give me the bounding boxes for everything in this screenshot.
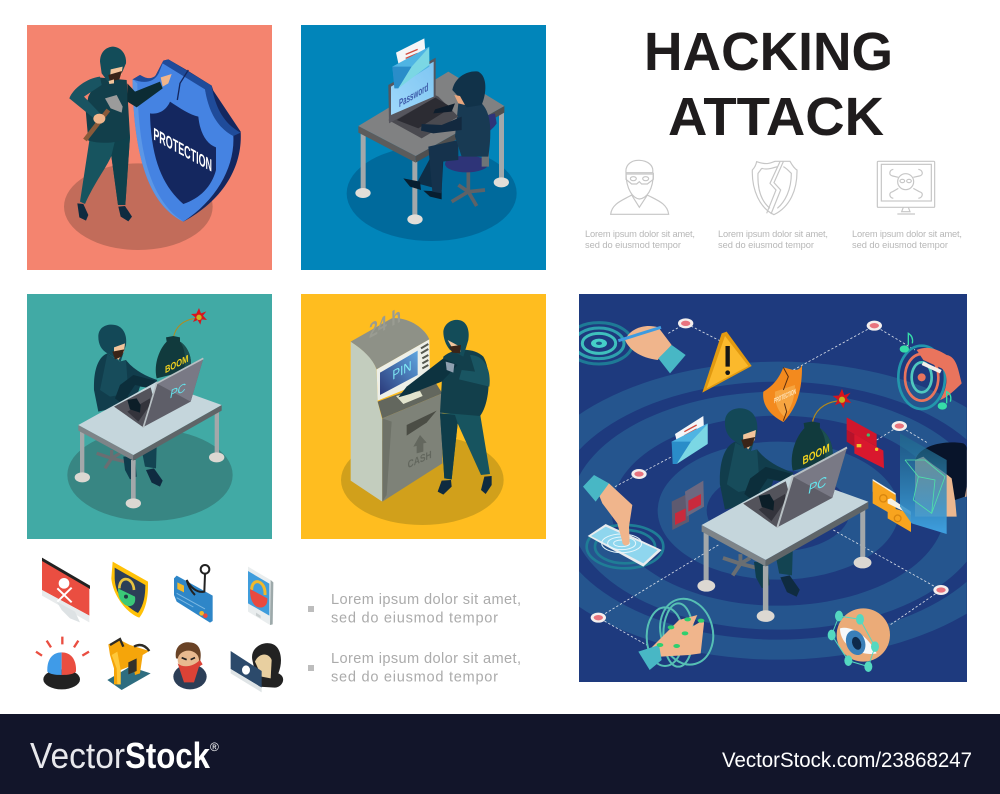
icon: phishing credit card	[174, 565, 213, 623]
title: HACKING	[644, 22, 893, 82]
network nodes	[591, 318, 949, 623]
icon: tablet with padlock	[248, 567, 273, 625]
icon: fingerprint phone	[583, 475, 663, 568]
hacker from behind	[403, 71, 490, 199]
icon: credit cards	[847, 417, 884, 468]
footer logo: Vector	[30, 735, 125, 776]
footer bar	[0, 714, 1000, 794]
icon: broken shield outline	[752, 161, 797, 215]
text block: bullet 1: Lorem ipsum dolor sit amet,	[331, 592, 521, 608]
icon: face recognition	[900, 433, 969, 534]
icon: hand drawing on target	[566, 323, 686, 373]
icon: trojan horse	[107, 639, 151, 690]
panel: hacker breaking protection shield	[27, 25, 272, 270]
text block: bullet 1	[308, 592, 521, 626]
caption 2: sed do eiusmod tempor	[718, 240, 814, 250]
caption 2: Lorem ipsum dolor sit amet,	[718, 229, 828, 239]
icon: folders	[873, 479, 911, 532]
central hacker at desk with bomb	[697, 389, 871, 622]
cash label: CASH	[408, 449, 432, 471]
shield label: PROTECTION	[153, 124, 212, 176]
ATM machine	[351, 303, 442, 502]
icon: protection shield	[133, 59, 241, 222]
floor shadow	[341, 435, 504, 525]
caption 1: sed do eiusmod tempor	[585, 240, 681, 250]
text block: bullet 2: Lorem ipsum dolor sit amet,	[331, 651, 521, 667]
caption 3	[852, 229, 962, 250]
panel: hacker stealing password on laptop	[301, 25, 546, 270]
panel: hacker at ATM	[301, 294, 546, 539]
icon: eye scan	[828, 608, 890, 672]
caption 2	[718, 229, 828, 250]
laptop with password screen	[388, 58, 462, 138]
text block: bullet 2: sed do eiusmod tempor	[331, 670, 498, 686]
caption 3: sed do eiusmod tempor	[852, 240, 948, 250]
hacker with hammer	[69, 47, 172, 221]
icon: shield with padlock	[111, 562, 148, 618]
laptop label: PC	[170, 380, 186, 401]
24h sign: 24 h	[369, 303, 401, 343]
text block: bullet 2	[308, 651, 521, 686]
caption 3: Lorem ipsum dolor sit amet,	[852, 229, 962, 239]
panel: hacking techniques network	[579, 294, 967, 682]
icon: SD cards	[672, 481, 704, 530]
icon: lips voice recognition	[898, 333, 962, 410]
icon: masked bandit	[173, 642, 207, 689]
floor shadow	[64, 163, 213, 250]
icon: monitor with skull outline	[877, 161, 935, 214]
desk	[355, 72, 509, 224]
footer logo: ®	[210, 740, 219, 754]
title	[644, 22, 893, 147]
bomb label: BOOM	[802, 441, 830, 468]
bomb label: BOOM	[165, 353, 188, 376]
footer logo: Stock	[125, 735, 211, 776]
title: ATTACK	[668, 87, 884, 147]
text block: bullet 1: sed do eiusmod tempor	[331, 610, 498, 626]
network connectors	[598, 323, 941, 645]
icon: alarm siren	[36, 637, 89, 689]
icon: envelope	[672, 416, 708, 464]
caption 1: Lorem ipsum dolor sit amet,	[585, 229, 695, 239]
screen label: Password	[399, 80, 428, 110]
caption 1	[585, 229, 695, 250]
chair	[445, 113, 497, 206]
icon: orange shield	[763, 365, 802, 422]
icon: envelope	[392, 38, 429, 88]
footer image id: VectorStock.com/23868247	[722, 749, 972, 772]
hacker at desk with bomb	[75, 308, 224, 508]
floor shadow	[67, 429, 233, 521]
icon: monitor with skull	[42, 558, 90, 622]
icon: orange shield: PROTECTION	[774, 387, 796, 405]
floor shadow	[347, 146, 517, 241]
icon: masked thief outline	[611, 160, 669, 214]
ATM screen label: PIN	[392, 358, 412, 384]
laptop label: PC	[808, 472, 827, 497]
panel: hacker planting bomb on PC	[27, 294, 272, 539]
icon: hand scan	[638, 598, 714, 670]
icon: warning triangle	[702, 332, 752, 393]
icon: hooded person behind computer	[231, 643, 283, 692]
footer logo	[30, 735, 219, 776]
hacker	[398, 320, 492, 495]
